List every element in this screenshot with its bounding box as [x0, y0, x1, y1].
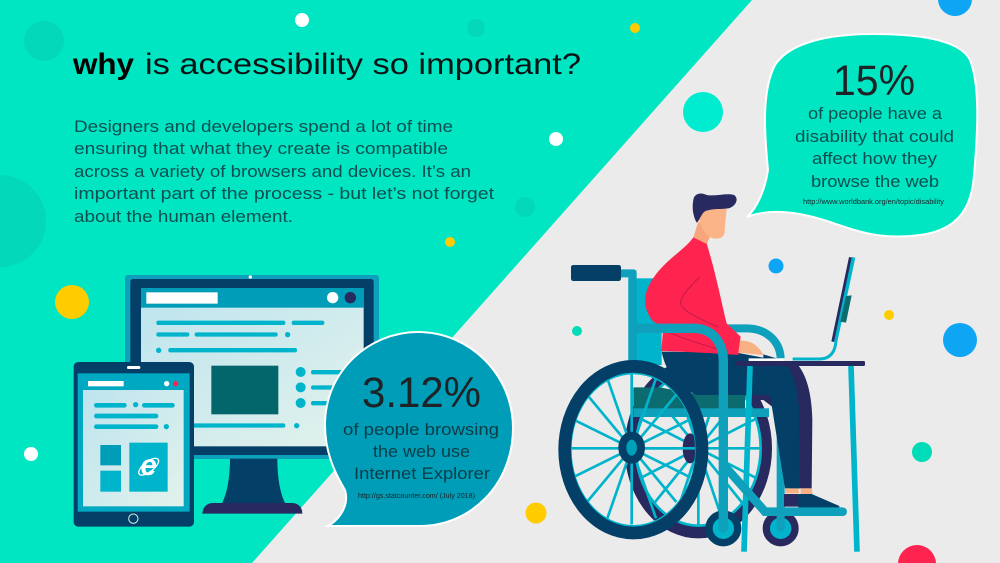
backrest: [628, 278, 662, 365]
intro text block: ensuring that what they create is compatible: [74, 139, 448, 158]
callout: 15%: 15%: [833, 57, 915, 105]
shoe: [785, 488, 799, 493]
far leg: [750, 362, 812, 488]
intro text block: important part of the process - but let’s not forget: [74, 184, 494, 203]
icon: Internet Explorer logo: [136, 449, 161, 482]
callout: 3.12%: [325, 332, 513, 526]
hair: [693, 193, 737, 223]
laptop: [793, 340, 836, 359]
callout: 3.12%: http://gs.statcounter.com/ (July 2018): [358, 493, 475, 500]
intro text block: Designers and developers spend a lot of time: [74, 117, 453, 136]
callout: 3.12%: Internet Explorer: [354, 464, 490, 483]
callout: 15%: http://www.worldbank.org/en/topic/disability: [803, 199, 945, 206]
callout: 15%: of people have a: [808, 104, 943, 123]
back wheel: [631, 364, 766, 532]
near leg: [662, 352, 800, 488]
callout: 15%: browse the web: [811, 172, 939, 191]
illustration: person in wheelchair at laptop: [565, 193, 865, 552]
torso: [645, 237, 741, 355]
intro text block: [74, 117, 494, 226]
desk: [735, 361, 865, 366]
illustration: tablet: [74, 362, 194, 527]
callout: 3.12%: of people browsing: [343, 420, 499, 439]
front wheel: [565, 366, 702, 533]
intro text block: across a variety of browsers and devices. It’s an: [74, 162, 471, 181]
footrest and far small wheel: [766, 514, 795, 543]
illustration: monitor: [125, 275, 379, 514]
title: why: [72, 48, 134, 81]
seat and under bar: [633, 387, 745, 412]
callout: 15%: disability that could: [795, 127, 954, 146]
callout: 3.12%: 3.12%: [362, 369, 481, 417]
icon: Internet Explorer logo: e: [141, 449, 157, 482]
callout: 3.12%: the web use: [373, 442, 470, 461]
teal diagonal background panel: [0, 0, 752, 563]
hand: [738, 341, 763, 355]
callout: 15%: [747, 34, 977, 237]
callout: 15%: affect how they: [812, 149, 938, 168]
title: is accessibility so important?: [145, 48, 581, 81]
far armrest: [725, 328, 781, 358]
near armrest: [633, 328, 723, 528]
neck and head: [693, 222, 713, 244]
near small wheel: [709, 514, 738, 543]
intro text block: about the human element.: [74, 207, 293, 226]
